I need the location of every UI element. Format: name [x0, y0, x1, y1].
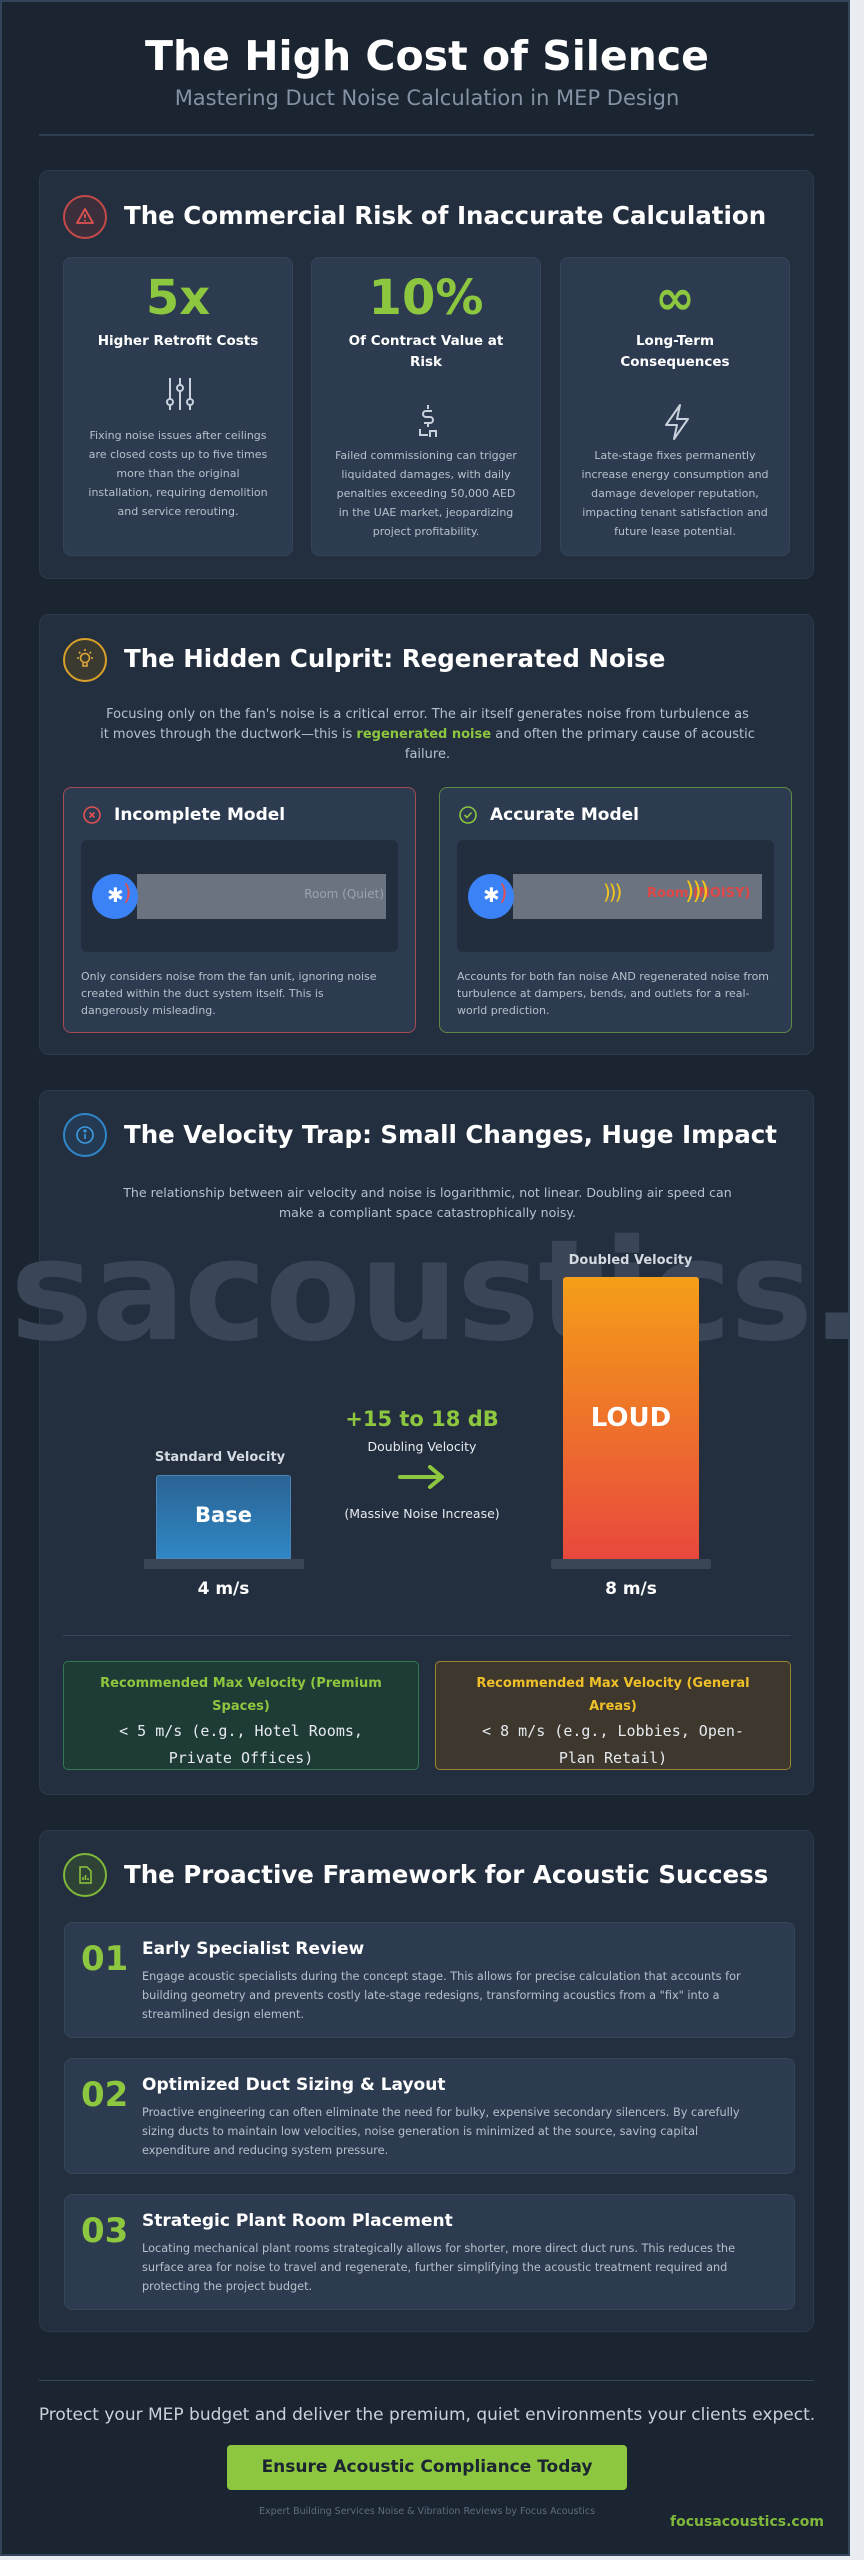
card: 5x [63, 257, 293, 556]
callout: general areas: Recommended Max Velocity (General [476, 1676, 750, 1691]
button: CTA: Ensure Acoustic Compliance Today [262, 2457, 592, 2477]
panel: incomplete model [63, 787, 416, 1033]
diagram: incomplete: ) [123, 881, 132, 906]
panel: accurate model: Accurate Model [490, 805, 639, 825]
callout: premium spaces: Private Offices) [169, 1749, 313, 1767]
icon: dollar [419, 405, 437, 437]
bar: base: Standard Velocity [155, 1450, 285, 1465]
step 03 [64, 2194, 795, 2310]
footer url: focusacoustics.com [670, 2514, 824, 2530]
tagline: Protect your MEP budget and deliver the premium, quiet environments your clients expect. [39, 2405, 815, 2425]
step 02 [64, 2058, 795, 2174]
arrow [398, 1464, 444, 1490]
callout: premium spaces: Spaces) [212, 1699, 270, 1714]
card: 10%: Risk [410, 354, 442, 370]
card: infinity: Consequences [620, 354, 730, 370]
step 03: 03 [81, 2211, 128, 2251]
subtitle: Mastering Duct Noise Calculation in MEP Design [175, 86, 679, 110]
panel: incomplete model: Incomplete Model [114, 805, 285, 825]
diagram: accurate: ))) [603, 880, 620, 904]
diagram: accurate: ) [499, 881, 508, 906]
card: 5x: 5x [146, 270, 210, 326]
step 03: Locating mechanical plant rooms strategically allows for shorter, more direct duct runs. This reduces the surface area for noise to travel and regenerate, further simplifying the acoustic treatment required and protecting the project budget. [142, 2242, 735, 2293]
intro text: Focusing only on the fan's noise is a critical error. The air itself generates noise from turbulence as it moves through the ductwork—this is regenerated noise and often the primary cause of acoustic failure. [100, 707, 755, 762]
step 02: 02 [81, 2075, 128, 2115]
callout: general areas: Areas) [589, 1699, 637, 1714]
diagram: accurate [457, 840, 774, 952]
title: The High Cost of Silence [145, 32, 709, 80]
diagram: accurate: Room (NOISY) [647, 886, 750, 901]
step 03: Strategic Plant Room Placement [142, 2211, 453, 2231]
panel: incomplete model: Only considers noise from the fan unit, ignoring noise created within the duct system itself. This is dangerously misleading. [81, 970, 377, 1017]
chart: velocity comparison: 8 m/s [605, 1579, 657, 1599]
panel: velocity trap [39, 1090, 814, 1795]
chart: velocity comparison [144, 1253, 711, 1599]
bar: loud [563, 1277, 699, 1559]
footer credit: Expert Building Services Noise & Vibration Reviews by Focus Acoustics [259, 2506, 595, 2517]
heading: The Hidden Culprit: Regenerated Noise [124, 644, 665, 673]
step 01: 01 [81, 1939, 128, 1979]
icon: sliders [166, 378, 194, 410]
callout: general areas [435, 1661, 791, 1770]
icon: document chart [63, 1853, 107, 1897]
card: 10%: Of Contract Value at [349, 333, 503, 349]
annotation: +15 to 18 dB [344, 1407, 500, 1521]
panel: commercial risk [39, 170, 814, 579]
diagram: accurate: ✱ [483, 883, 500, 907]
chart: velocity comparison: Doubled Velocity [569, 1253, 692, 1268]
card: 5x: Fixing noise issues after ceilings are closed costs up to five times more than the original installation, requiring demolition and service rerouting. [88, 429, 268, 518]
annotation: +15 to 18 dB: Doubling Velocity [368, 1439, 476, 1454]
card: 10%: 10% [369, 270, 483, 326]
step 02: Optimized Duct Sizing & Layout [142, 2075, 445, 2095]
chart: velocity comparison: LOUD [591, 1403, 671, 1433]
step 01 [64, 1922, 795, 2038]
callout: premium spaces: Recommended Max Velocity (Premium [100, 1676, 382, 1691]
diagram: accurate: ))) [685, 877, 707, 905]
diagram: incomplete: ✱ [107, 883, 124, 907]
heading: The Commercial Risk of Inaccurate Calculation [124, 201, 766, 230]
heading: The Proactive Framework for Acoustic Success [124, 1860, 768, 1889]
icon: info [63, 1113, 107, 1157]
callout: general areas: < 8 m/s (e.g., Lobbies, Open- [482, 1722, 744, 1740]
diagram: incomplete: Room (Quiet) [304, 887, 384, 901]
card: 10%: Failed commissioning can trigger liquidated damages, with daily penalties exceeding 50,000 AED in the UAE market, jeopardizing project profitability. [335, 449, 517, 538]
step 01: Engage acoustic specialists during the concept stage. This allows for precise calculation that accounts for building geometry and prevents costly late-stage redesigns, transforming acoustics from a "fix" into a streamlined design element. [142, 1970, 741, 2021]
card: 5x: Higher Retrofit Costs [98, 333, 258, 349]
diagram: incomplete [81, 840, 398, 952]
step 02: Proactive engineering can often eliminate the need for bulky, expensive secondary silencers. By carefully sizing ducts to maintain low velocities, noise generation is minimized at the source, saving capital expenditure and reducing system pressure. [142, 2106, 740, 2157]
callout: general areas: Plan Retail) [559, 1749, 667, 1767]
button: CTA [227, 2445, 627, 2490]
icon: lightbulb [63, 638, 107, 682]
annotation: +15 to 18 dB: (Massive Noise Increase) [344, 1506, 500, 1521]
card: 10% [311, 257, 541, 556]
chart: velocity comparison: Base [195, 1503, 252, 1527]
heading: The Velocity Trap: Small Changes, Huge Impact [124, 1120, 777, 1149]
callout: premium spaces: < 5 m/s (e.g., Hotel Rooms, [119, 1722, 363, 1740]
chart: velocity comparison: 4 m/s [198, 1579, 249, 1599]
icon: lightning [665, 404, 689, 440]
panel: proactive framework [39, 1830, 814, 2332]
card: infinity: Late-stage fixes permanently increase energy consumption and damage developer reputation, impacting tenant satisfaction and future lease potential. [581, 449, 769, 538]
card: infinity: Long-Term [636, 333, 714, 349]
card: infinity [560, 257, 790, 556]
icon: warning [63, 195, 107, 239]
step 01: Early Specialist Review [142, 1939, 364, 1959]
card: infinity: ∞ [655, 270, 695, 326]
panel: accurate model: Accounts for both fan noise AND regenerated noise from turbulence at dampers, bends, and outlets for a real-world prediction. [457, 970, 769, 1017]
panel: regenerated noise [39, 614, 814, 1055]
icon: check circle [459, 806, 477, 824]
panel: accurate model [439, 787, 792, 1033]
callout: premium spaces [63, 1661, 419, 1770]
annotation: +15 to 18 dB: +15 to 18 dB [345, 1407, 499, 1431]
watermark: sacoustics. [10, 1210, 850, 1373]
intro text: The relationship between air velocity and noise is logarithmic, not linear. Doubling air speed can make a compliant space catastrophically noisy. [123, 1185, 732, 1220]
icon: x circle [83, 806, 101, 824]
